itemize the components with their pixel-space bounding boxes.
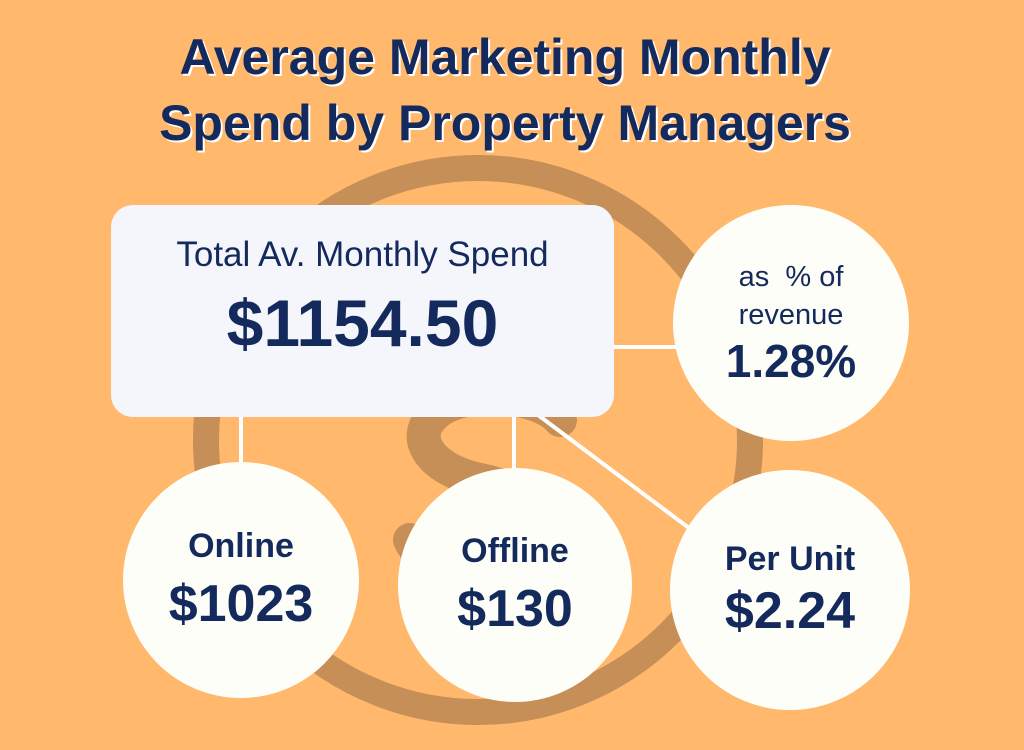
circle: offline [398, 468, 632, 702]
label: total: Total Av. Monthly Spend [176, 235, 549, 274]
circle: % of revenue: revenue [739, 299, 843, 331]
title: Spend by Property Managers [159, 95, 851, 151]
circle: per unit: Per Unit [725, 540, 855, 578]
title [159, 29, 851, 152]
circle: % of revenue: as % of [739, 261, 843, 293]
circle: offline: $130 [457, 580, 573, 638]
panel: total spend [111, 205, 614, 417]
circle: online: $1023 [169, 574, 313, 632]
circle: % of revenue: 1.28% [726, 335, 856, 387]
circle: per unit [670, 470, 910, 710]
circle: online [123, 462, 359, 698]
title: Average Marketing Monthly [179, 29, 831, 85]
circle: offline: Offline [461, 532, 569, 570]
circle: % of revenue [673, 205, 909, 441]
circle: per unit: $2.24 [725, 582, 855, 640]
circle: online: Online [188, 526, 294, 564]
value: total: $1154.50 [227, 286, 498, 360]
